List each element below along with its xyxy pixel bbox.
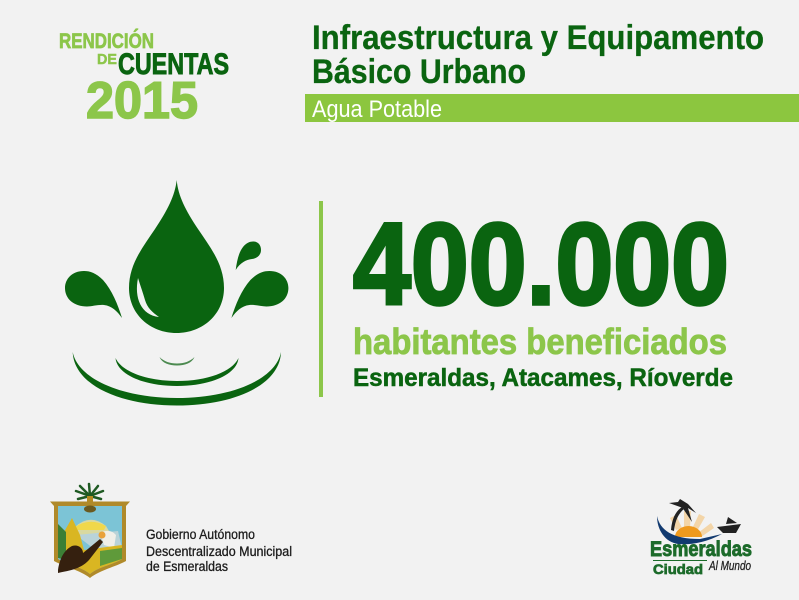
subtitle bar: Agua Potable: Agua Potable bbox=[312, 96, 442, 123]
icon: small splash drop bbox=[236, 242, 261, 270]
divider line bbox=[319, 201, 323, 397]
sun bbox=[675, 526, 702, 537]
palm bbox=[671, 507, 684, 531]
emblem arch bbox=[72, 520, 112, 536]
icon: water drop with splash and ripples bbox=[65, 180, 288, 406]
big number: 400.000: 400.000 bbox=[353, 199, 729, 329]
logo: Rendición de Cuentas 2015: CUENTAS bbox=[118, 48, 229, 81]
title: Básico Urbano bbox=[312, 53, 526, 91]
text: habitantes beneficiados: habitantes beneficiados bbox=[353, 321, 727, 362]
logo: Esmeraldas Ciudad Al Mundo bbox=[650, 499, 752, 577]
text: locations: Esmeraldas, Atacames, Ríoverde bbox=[353, 364, 733, 392]
icon: left splash drop bbox=[65, 271, 122, 318]
logo: Rendición de Cuentas 2015 bbox=[59, 29, 229, 130]
text: Esmeraldas: Esmeraldas bbox=[650, 538, 752, 561]
logo: Rendición de Cuentas 2015: DE bbox=[97, 52, 117, 68]
green forest bbox=[58, 524, 66, 560]
icon: outer ripple bbox=[73, 352, 281, 406]
torch flame bbox=[98, 532, 106, 538]
text: Gobierno Autónomo Descentralizado Municipal de Esmeraldas bbox=[146, 527, 292, 574]
text: Gobierno Autónomo Descentralizado Municipal de Esmeraldas: Gobierno Autónomo bbox=[146, 527, 255, 542]
title bbox=[312, 19, 764, 91]
clouds and hills bbox=[76, 531, 122, 552]
text: Al Mundo: Al Mundo bbox=[708, 558, 751, 573]
logo: Rendición de Cuentas 2015: 2015 bbox=[86, 72, 198, 130]
title: Infraestructura y Equipamento bbox=[312, 19, 764, 57]
icon: drop highlight bbox=[137, 278, 159, 317]
sun rays bbox=[670, 511, 714, 537]
text: Ciudad: Ciudad bbox=[653, 561, 703, 577]
wave bbox=[657, 516, 722, 544]
shield top bar bbox=[50, 502, 130, 506]
figure bbox=[58, 539, 103, 573]
palm top bbox=[76, 484, 103, 499]
subtitle bar: Agua Potable bbox=[305, 94, 799, 123]
boat bbox=[717, 517, 741, 533]
logo: Rendición de Cuentas 2015: RENDICIÓN bbox=[59, 29, 154, 53]
icon: right splash drop bbox=[231, 271, 288, 318]
shield body bbox=[54, 505, 126, 578]
text: Gobierno Autónomo Descentralizado Municipal de Esmeraldas: de Esmeraldas bbox=[146, 559, 228, 574]
logo: municipal coat of arms bbox=[50, 484, 130, 578]
text: Gobierno Autónomo Descentralizado Municipal de Esmeraldas: Descentralizado Municipal bbox=[146, 544, 292, 559]
ornament bbox=[84, 506, 96, 512]
icon: main drop bbox=[129, 180, 224, 333]
icon: middle ripple bbox=[116, 358, 238, 386]
shield field bbox=[58, 506, 122, 574]
icon: inner ripple bbox=[160, 357, 194, 366]
underline bbox=[653, 560, 707, 561]
yellow land bbox=[64, 518, 122, 574]
